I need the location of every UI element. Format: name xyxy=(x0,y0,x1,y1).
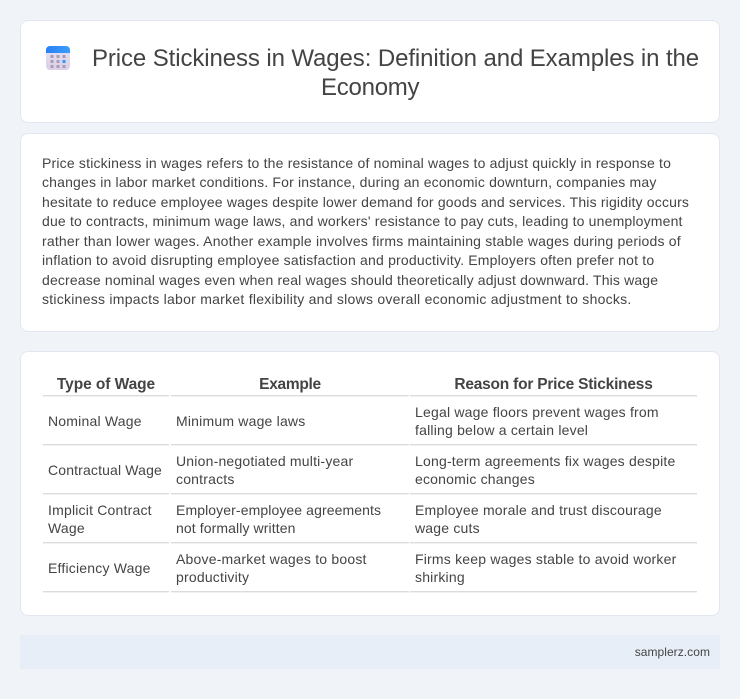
intro paragraph: stickiness impacts labor market flexibility and slows overall economic adjustment to shocks. xyxy=(42,291,632,307)
table: Minimum wage laws xyxy=(176,413,305,429)
intro paragraph: rather than lower wages. Another example involves firms maintaining stable wages during periods of xyxy=(42,233,681,249)
table: wage cuts xyxy=(415,520,480,536)
intro paragraph: decrease nominal wages even when real wages should theoretically adjust downward. This wage xyxy=(42,272,658,288)
intro paragraph: changes in labor market conditions. For instance, during an economic downturn, companies may xyxy=(42,174,657,190)
table: falling below a certain level xyxy=(415,422,588,438)
table: not formally written xyxy=(176,520,295,536)
title: Price Stickiness in Wages: Definition and Examples in the xyxy=(92,45,699,72)
header: reason: Reason for Price Stickiness xyxy=(454,376,653,393)
icon: calendar xyxy=(46,46,70,70)
footer bar xyxy=(20,635,720,669)
intro paragraph: inflation to avoid disrupting employee satisfaction and productivity. Employers often prefer not to xyxy=(42,252,654,268)
table: contracts xyxy=(176,471,235,487)
table: productivity xyxy=(176,569,249,585)
row 3: Implicit Contract xyxy=(48,502,152,518)
intro card xyxy=(20,133,720,332)
intro paragraph: Price stickiness in wages refers to the resistance of nominal wages to adjust quickly in response to xyxy=(42,155,671,171)
intro paragraph: due to contracts, minimum wage laws, and workers' resistance to pay cuts, leading to unemployment xyxy=(42,213,683,229)
table: Legal wage floors prevent wages from xyxy=(415,404,659,420)
row 3: Wage xyxy=(48,520,85,536)
table: Union-negotiated multi-year xyxy=(176,453,353,469)
row 2: Contractual Wage xyxy=(48,462,162,478)
row 3 xyxy=(48,502,152,536)
title xyxy=(92,45,699,101)
table: Firms keep wages stable to avoid worker xyxy=(415,551,676,567)
header: example: Example xyxy=(259,376,321,393)
row 1: Nominal Wage xyxy=(48,413,142,429)
intro paragraph xyxy=(42,155,689,307)
header: type of wage: Type of Wage xyxy=(57,376,155,393)
table: Employer-employee agreements xyxy=(176,502,381,518)
table: Employee morale and trust discourage xyxy=(415,502,662,518)
footer text: samplerz.com xyxy=(635,645,710,659)
table xyxy=(43,376,697,593)
title: Economy xyxy=(321,74,419,101)
intro paragraph: hesitate to reduce employee wages despite lower demand for goods and services. This rigidity occurs xyxy=(42,194,689,210)
table: economic changes xyxy=(415,471,535,487)
table: Long-term agreements fix wages despite xyxy=(415,453,676,469)
header card xyxy=(20,20,720,123)
table card xyxy=(20,351,720,616)
table: shirking xyxy=(415,569,465,585)
row 4: Efficiency Wage xyxy=(48,560,151,576)
table: Above-market wages to boost xyxy=(176,551,367,567)
